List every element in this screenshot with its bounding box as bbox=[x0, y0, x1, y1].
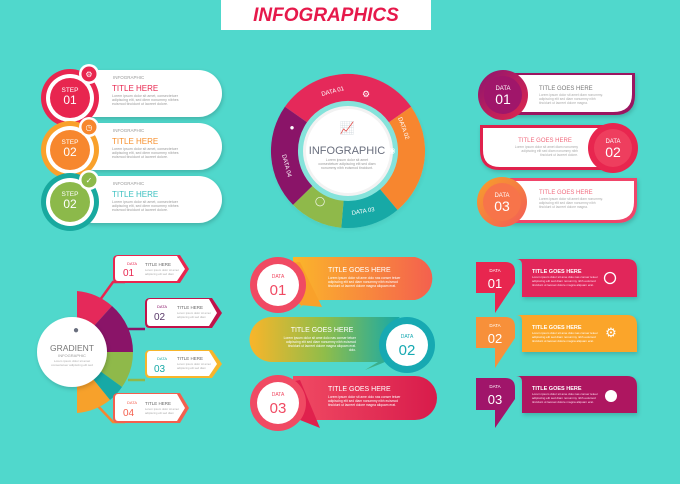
card 01: Lorem ipsum dolor sit amet bbox=[145, 268, 179, 272]
pill row 3: 03 bbox=[270, 400, 286, 417]
badge row 1: TITLE GOES HERE bbox=[539, 86, 593, 92]
card 03: DATA bbox=[157, 356, 167, 361]
pill row 2: TITLE GOES HERE bbox=[291, 327, 354, 334]
tag row 2: Lorem ipsum dolor sit ame dolo nas conser tetuer bbox=[532, 331, 598, 335]
tag row 2: adipiscing elit sed diam nonummy nibh euismod bbox=[532, 335, 596, 339]
card 01: adipiscing elit sed diam bbox=[145, 272, 175, 276]
step 1: euismod tincidunt ut laoreet dolore. bbox=[112, 102, 168, 106]
pill row 3: tincidunt ut laoreet dolore magna aliquam erat. bbox=[328, 403, 396, 407]
badge row 1: DATA bbox=[495, 86, 511, 92]
badge row 3: Lorem ipsum dolor sit amet diam nonummy. bbox=[539, 197, 603, 201]
tag row 1 bbox=[476, 259, 637, 313]
tag row 3: adipiscing elit sed diam nonummy nibh euismod bbox=[532, 396, 596, 400]
tag row 3: Lorem ipsum dolor sit ame dolo nas conser tetuer bbox=[532, 392, 598, 396]
pill row 3: adipiscing elit sed diam nonummy nibh euismod bbox=[328, 399, 398, 403]
panel: gradient infographic bbox=[37, 255, 222, 423]
panel: circular infographic: DATA 01 bbox=[321, 86, 345, 98]
card 03: adipiscing elit sed diam bbox=[177, 366, 207, 370]
step 3 bbox=[41, 170, 222, 231]
card 02: adipiscing elit sed diam bbox=[177, 315, 207, 319]
step 1: adipiscing elit, sed diem nonummy nibhes bbox=[112, 98, 179, 102]
step 2: euismod tincidunt ut laoreet dolore. bbox=[112, 155, 168, 159]
pill row 1: adipiscing elit sed diam nonummy nibh euismod bbox=[328, 280, 398, 284]
panel: data badges top-right bbox=[477, 70, 638, 227]
step 3: Lorem ipsum dolor sit amet, consectetuer bbox=[112, 200, 179, 204]
panel: circular infographic: consectetuer adipiscing elit sed diam bbox=[318, 162, 376, 166]
tag row 1: TITLE GOES HERE bbox=[532, 269, 582, 275]
tag row 3: TITLE GOES HERE bbox=[532, 386, 582, 392]
step 1: STEP bbox=[62, 87, 78, 94]
card 03: Lorem ipsum dolor sit amet bbox=[177, 362, 211, 366]
badge row 1: 01 bbox=[495, 91, 511, 107]
pill row 3: Lorem ipsum dolor sit ame dolo nas conser tetuer bbox=[328, 395, 401, 399]
tag row 1: adipiscing elit sed diam nonummy nibh euismod bbox=[532, 279, 596, 283]
step 2: Lorem ipsum dolor sit amet, consectetuer bbox=[112, 147, 179, 151]
panel: circular infographic: ◉ bbox=[389, 146, 396, 155]
pill row 2: DATA bbox=[401, 334, 414, 340]
pill row 1: TITLE GOES HERE bbox=[328, 267, 391, 274]
step 3: ✓ bbox=[86, 176, 92, 185]
step 2: TITLE HERE bbox=[112, 137, 158, 146]
badge row 1: Lorem ipsum dolor sit amet diam nonummy. bbox=[539, 93, 603, 97]
card 02: DATA bbox=[157, 304, 167, 309]
panel: circular infographic: nonummy nibh euismod tincidunt. bbox=[321, 166, 373, 170]
step 3: STEP bbox=[62, 191, 78, 198]
badge row 1: tincidunt ut laoreet dolore magna. bbox=[539, 101, 588, 105]
badge row 3: 03 bbox=[494, 198, 510, 214]
card 04: Lorem ipsum dolor sit amet bbox=[145, 407, 179, 411]
panel: circular infographic: 📈 bbox=[340, 121, 355, 135]
card 01: TITLE HERE bbox=[145, 262, 171, 267]
card 03 bbox=[145, 350, 222, 378]
pill row 1: tincidunt ut laoreet dolore magna aliquam erat. bbox=[328, 284, 396, 288]
center circle: Lorem ipsum dolor sit amet bbox=[54, 359, 90, 363]
badge row 2: Lorem ipsum dolor sit amet diam nonummy bbox=[515, 145, 578, 149]
tag row 2: TITLE GOES HERE bbox=[532, 325, 582, 331]
badge row 3: DATA bbox=[494, 193, 510, 199]
step 1: TITLE HERE bbox=[112, 84, 158, 93]
step 2 bbox=[41, 117, 222, 179]
title bbox=[221, 0, 431, 30]
card 04 bbox=[113, 393, 189, 423]
card 04: adipiscing elit sed diam bbox=[145, 411, 175, 415]
tag row 1: Lorem ipsum dolor sit ame dolo nas conser tetuer bbox=[532, 275, 598, 279]
badge row 3 bbox=[477, 177, 637, 227]
card 03: TITLE HERE bbox=[177, 356, 203, 361]
panel: circular infographic: ⚙ bbox=[362, 89, 370, 99]
step 1: 01 bbox=[63, 93, 77, 107]
pill row 2: tincidunt ut laoreet dolore magna aliquam erat. bbox=[288, 344, 356, 348]
badge row 2: tincidunt ut laoreet dolore. bbox=[540, 153, 578, 157]
tag row 2 bbox=[476, 315, 637, 368]
center circle: INFOGRAPHIC bbox=[58, 353, 86, 358]
panel: circular infographic: Lorem ipsum dolor sit amet bbox=[326, 158, 368, 162]
step 1: INFOGRAPHIC bbox=[113, 75, 145, 80]
badge row 2: DATA bbox=[605, 139, 621, 145]
step 2: 02 bbox=[63, 145, 77, 159]
tag row 1: DATA bbox=[489, 268, 501, 273]
tag row 1: tincidunt ut laoreet dolore magna aliquam erat. bbox=[532, 283, 594, 287]
center circle: ● bbox=[73, 325, 79, 336]
card 02: TITLE HERE bbox=[177, 305, 203, 310]
connector lines bbox=[95, 282, 145, 422]
panel: circular infographic: ● bbox=[290, 123, 295, 132]
ring bbox=[77, 291, 133, 413]
step 2: ◷ bbox=[86, 123, 93, 132]
panel: circular infographic: DATA 02 bbox=[396, 117, 410, 141]
step 2: STEP bbox=[62, 139, 78, 146]
card 04: TITLE HERE bbox=[145, 401, 171, 406]
pill row 3: DATA bbox=[272, 392, 285, 398]
panel: circular infographic: DATA 03 bbox=[351, 207, 376, 217]
badge row 3: TITLE GOES HERE bbox=[539, 190, 593, 196]
panel: steps bbox=[41, 64, 222, 231]
panel: tags bottom-right bbox=[476, 259, 637, 428]
step 3: euismod tincidunt ut laoreet dolore. bbox=[112, 208, 168, 212]
panel: data pills bottom-middle bbox=[250, 257, 437, 431]
card 01: 01 bbox=[123, 268, 135, 279]
step 3: 02 bbox=[63, 197, 77, 211]
step 3: adipiscing elit, sed diem nonummy nibhes bbox=[112, 204, 179, 208]
title: INFOGRAPHICS bbox=[253, 5, 399, 26]
step 1 bbox=[41, 64, 222, 127]
tag row 2: ⚙ bbox=[605, 325, 617, 340]
badge row 2: TITLE GOES HERE bbox=[518, 138, 572, 144]
pill row 2: 02 bbox=[399, 342, 415, 359]
panel: circular infographic: DATA 04 bbox=[280, 154, 292, 178]
pill row 1: 01 bbox=[270, 282, 286, 299]
badge row 2 bbox=[480, 123, 638, 173]
tag row 3: 03 bbox=[488, 392, 502, 407]
tag row 3 bbox=[476, 376, 637, 428]
pill row 2: adipiscing elit sed diam nonummy nibh euismod bbox=[286, 340, 356, 344]
card 02 bbox=[145, 298, 222, 328]
pill row 3: TITLE GOES HERE bbox=[328, 386, 391, 393]
badge row 2: 02 bbox=[605, 144, 621, 160]
pill row 2 bbox=[250, 317, 435, 373]
pill row 2: Lorem ipsum dolor sit ame dolo nas conser tetuer bbox=[284, 336, 357, 340]
card 02: Lorem ipsum dolor sit amet bbox=[177, 311, 211, 315]
badge row 1: adipiscing elit sed diam nonummy nibh bbox=[539, 97, 596, 101]
pill row 1 bbox=[250, 257, 432, 313]
pill row 2: dolo. bbox=[349, 348, 356, 352]
badge row 2: adipiscing elit sed diam nonummy nibh bbox=[521, 149, 578, 153]
panel: circular infographic: INFOGRAPHIC bbox=[309, 145, 385, 157]
card 04: DATA bbox=[127, 400, 137, 405]
badge row 3: tincidunt ut laoreet dolore magna. bbox=[539, 205, 588, 209]
step 3: TITLE HERE bbox=[112, 190, 158, 199]
tag row 3: tincidunt ut laoreet dolore magna aliquam erat. bbox=[532, 400, 594, 404]
center circle bbox=[37, 317, 107, 387]
card 04: 04 bbox=[123, 408, 135, 419]
card 03: 03 bbox=[154, 364, 166, 375]
step 3: INFOGRAPHIC bbox=[113, 181, 145, 186]
panel: circular infographic: ◯ bbox=[315, 196, 325, 207]
step 2: INFOGRAPHIC bbox=[113, 128, 145, 133]
card 01: DATA bbox=[127, 261, 137, 266]
tag row 1: 01 bbox=[488, 276, 502, 291]
card 02: 02 bbox=[154, 312, 166, 323]
step 1: ⚙ bbox=[85, 70, 93, 79]
tag row 2: DATA bbox=[489, 323, 501, 328]
badge row 1 bbox=[478, 70, 635, 120]
center circle: consectetuer adipiscing elit sed bbox=[51, 363, 93, 367]
card 01 bbox=[113, 255, 189, 283]
ring segments bbox=[271, 74, 425, 228]
center circle: GRADIENT bbox=[50, 343, 94, 353]
panel: circular infographic bbox=[271, 74, 425, 228]
badge row 3: adipiscing elit sed diam nonummy nibh bbox=[539, 201, 596, 205]
tag row 2: 02 bbox=[488, 331, 502, 346]
step 1: Lorem ipsum dolor sit amet, consectetuer bbox=[112, 94, 179, 98]
pill row 1: DATA bbox=[272, 274, 285, 280]
step 2: adipiscing elit, sed diem nonummy nibhes bbox=[112, 151, 179, 155]
pill row 3 bbox=[250, 375, 437, 431]
tag row 2: tincidunt ut laoreet dolore magna aliquam erat. bbox=[532, 339, 594, 343]
tag row 3: DATA bbox=[489, 384, 501, 389]
pill row 1: Lorem ipsum dolor sit ame dolo nas conser tetuer bbox=[328, 276, 401, 280]
